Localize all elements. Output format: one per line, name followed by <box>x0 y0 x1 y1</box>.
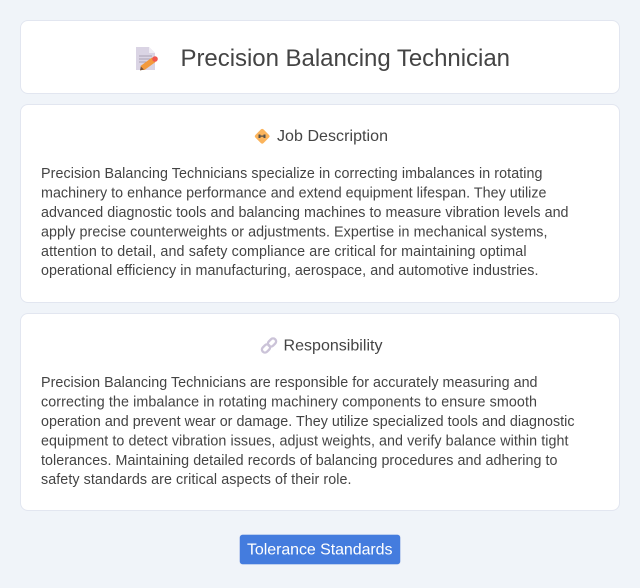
panel: responsibility <box>20 313 620 511</box>
text: job description: advanced diagnostic tools and balancing machines to measure vibration levels and <box>41 205 569 221</box>
title: Precision Balancing Technician <box>180 45 510 72</box>
heading: job description: Job Description <box>277 128 388 145</box>
text: job description: attention to detail, and safety compliance are critical for maintaining optimal <box>41 244 526 260</box>
heading: responsibility: Responsibility <box>284 338 382 354</box>
panel: job description <box>20 104 620 303</box>
button: tolerance standards <box>240 534 400 564</box>
text: responsibility: correcting the imbalance in rotating machinery components to ensure smooth <box>41 394 537 410</box>
panel: title <box>20 20 620 94</box>
text: responsibility: safety standards are critical aspects of their role. <box>41 472 352 488</box>
text: job description: operational efficiency in manufacturing, aerospace, and automotive industries. <box>41 263 538 279</box>
text: job description: apply precise counterweights or adjustments. Expertise in mechanical systems, <box>41 224 548 240</box>
text: responsibility: Precision Balancing Technicians are responsible for accurately measuring and <box>41 375 538 391</box>
text: job description: machinery to enhance performance and extend equipment lifespan. They utilize <box>41 186 547 202</box>
button: tolerance standards: Tolerance Standards <box>247 542 392 558</box>
icon: chain link <box>261 337 277 354</box>
text: job description: Precision Balancing Technicians specialize in correcting imbalances in rotating <box>41 166 543 182</box>
text: responsibility: operation and prevent wear or damage. They utilize specialized tools and diagnostic <box>41 414 574 430</box>
text: responsibility: tolerances. Maintaining detailed records of balancing procedures and adhering to <box>41 453 558 469</box>
icon: road sign <box>254 128 270 144</box>
text: job description <box>41 166 569 279</box>
text: responsibility <box>41 375 574 488</box>
icon: document with pencil <box>136 47 158 70</box>
text: responsibility: equipment to detect vibration issues, adjust weights, and verify balance within tight <box>41 434 569 450</box>
